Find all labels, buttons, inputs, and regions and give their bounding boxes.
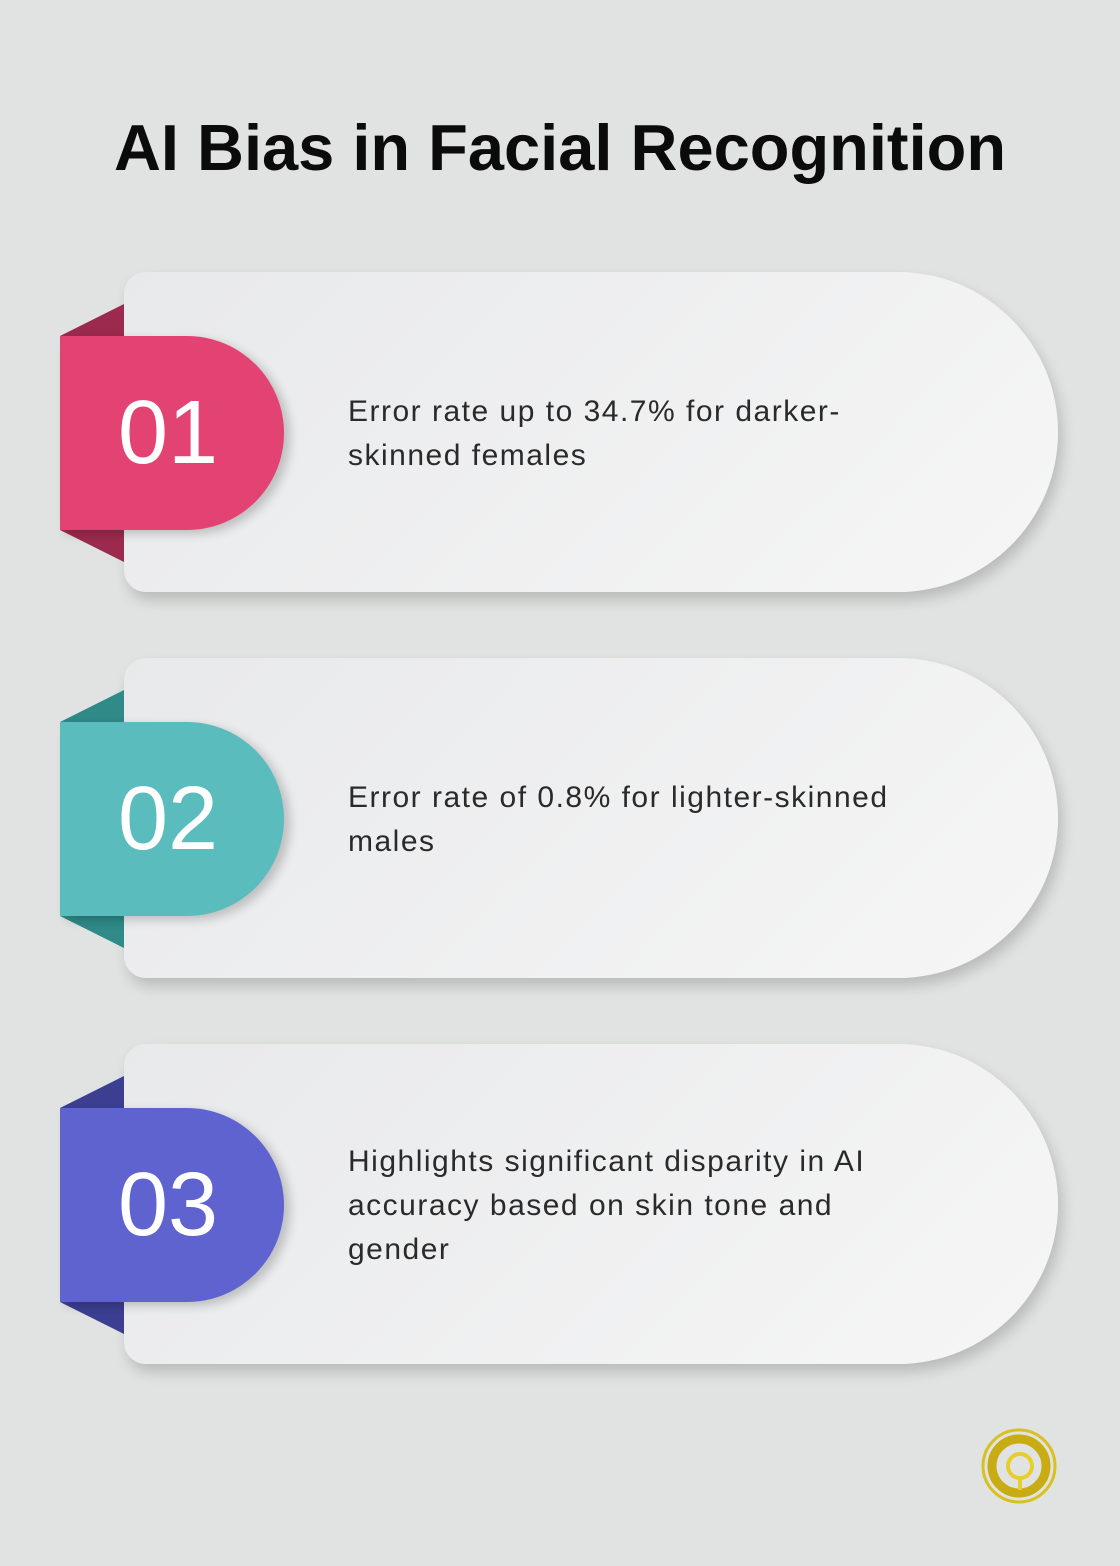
text 2: males bbox=[348, 825, 436, 858]
panel: item 2 bbox=[60, 658, 1068, 992]
badge 02: 02 bbox=[118, 769, 218, 869]
text 3: accuracy based on skin tone and bbox=[348, 1189, 833, 1222]
title: AI Bias in Facial Recognition bbox=[114, 111, 1006, 184]
panel: item 3 bbox=[60, 1044, 1068, 1378]
badge 01: 01 bbox=[118, 383, 218, 483]
fold 2 bbox=[60, 690, 124, 948]
badge 01 bbox=[60, 336, 284, 530]
text 3 bbox=[348, 1145, 865, 1266]
card 3 bbox=[124, 1044, 1058, 1364]
text 3: gender bbox=[348, 1233, 450, 1266]
text 2: Error rate of 0.8% for lighter-skinned bbox=[348, 781, 889, 814]
badge 03 bbox=[60, 1108, 284, 1302]
text 1: skinned females bbox=[348, 439, 587, 472]
text 3: Highlights significant disparity in AI bbox=[348, 1145, 865, 1178]
card 1 bbox=[124, 272, 1058, 592]
text 2 bbox=[348, 781, 889, 858]
fold 1 bbox=[60, 304, 124, 562]
text 1: Error rate up to 34.7% for darker- bbox=[348, 395, 841, 428]
badge 03: 03 bbox=[118, 1155, 218, 1255]
text 1 bbox=[348, 395, 841, 472]
card 2 bbox=[124, 658, 1058, 978]
icon: logo bbox=[982, 1428, 1056, 1504]
panel: item 1 bbox=[60, 272, 1068, 606]
fold 3 bbox=[60, 1076, 124, 1334]
badge 02 bbox=[60, 722, 284, 916]
